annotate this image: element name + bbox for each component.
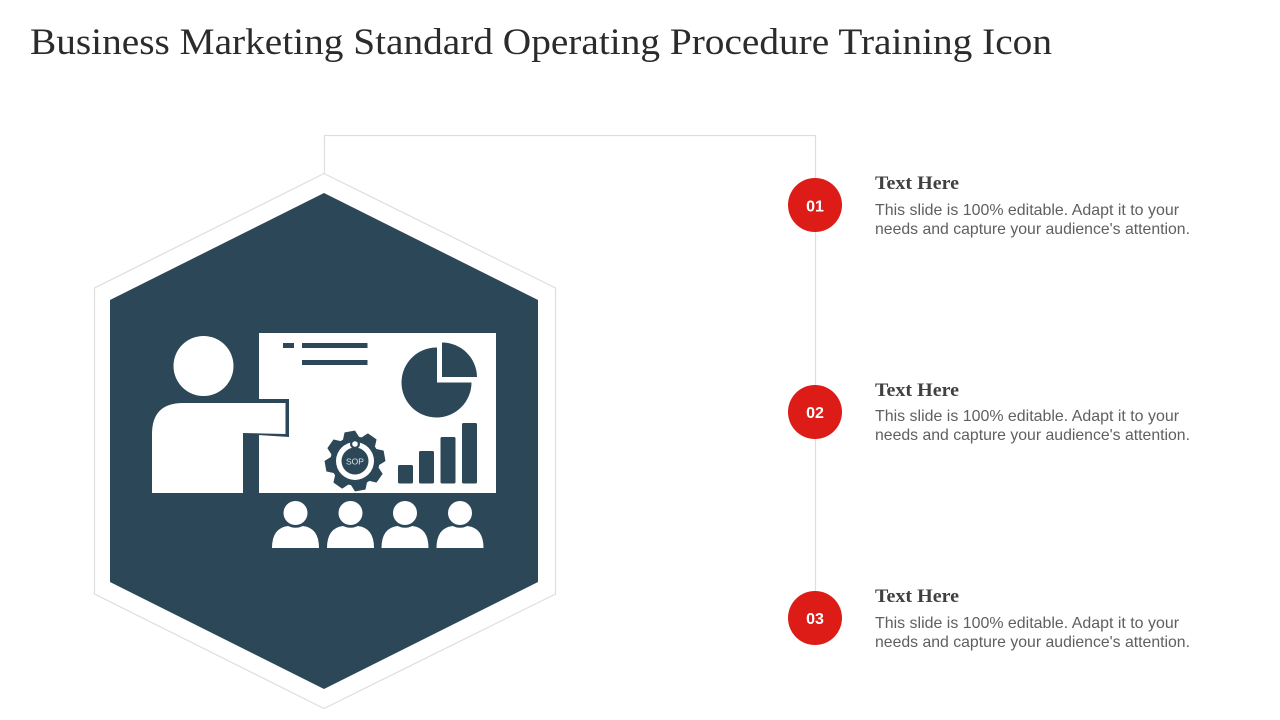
description 01: needs and capture your audience's attention. xyxy=(875,221,1190,238)
title: Business Marketing Standard Operating Procedure Training Icon xyxy=(30,22,1052,63)
connector line xyxy=(324,136,816,618)
item 01 xyxy=(788,174,1190,238)
description 03: needs and capture your audience's attention. xyxy=(875,634,1190,651)
badge 03 xyxy=(788,591,842,645)
icon: SOP gear xyxy=(325,431,385,491)
board text lines xyxy=(283,343,368,365)
description 02: needs and capture your audience's attention. xyxy=(875,427,1190,444)
pie chart xyxy=(401,342,477,417)
description 03: This slide is 100% editable. Adapt it to your xyxy=(875,615,1180,632)
audience xyxy=(272,501,484,548)
badge 01: 01 xyxy=(806,198,824,216)
whiteboard xyxy=(259,333,496,493)
presenter figure xyxy=(152,336,289,493)
badge 02 xyxy=(788,385,842,439)
icon: training presentation xyxy=(152,333,496,548)
hexagon panel xyxy=(110,193,538,689)
heading 02: Text Here xyxy=(875,381,959,401)
item 02 xyxy=(788,381,1190,444)
description 01 xyxy=(875,202,1190,238)
description 02: This slide is 100% editable. Adapt it to your xyxy=(875,408,1180,425)
icon: SOP gear: SOP xyxy=(346,456,364,466)
description 02 xyxy=(875,408,1190,444)
hexagon outline xyxy=(94,174,556,708)
badge 02: 02 xyxy=(806,405,824,422)
item 03 xyxy=(788,587,1190,651)
description 03 xyxy=(875,615,1190,651)
heading 01: Text Here xyxy=(875,174,959,194)
badge 03: 03 xyxy=(806,611,824,628)
heading 03: Text Here xyxy=(875,587,959,607)
badge 01 xyxy=(788,178,842,232)
description 01: This slide is 100% editable. Adapt it to your xyxy=(875,202,1180,219)
bar chart xyxy=(398,423,477,484)
